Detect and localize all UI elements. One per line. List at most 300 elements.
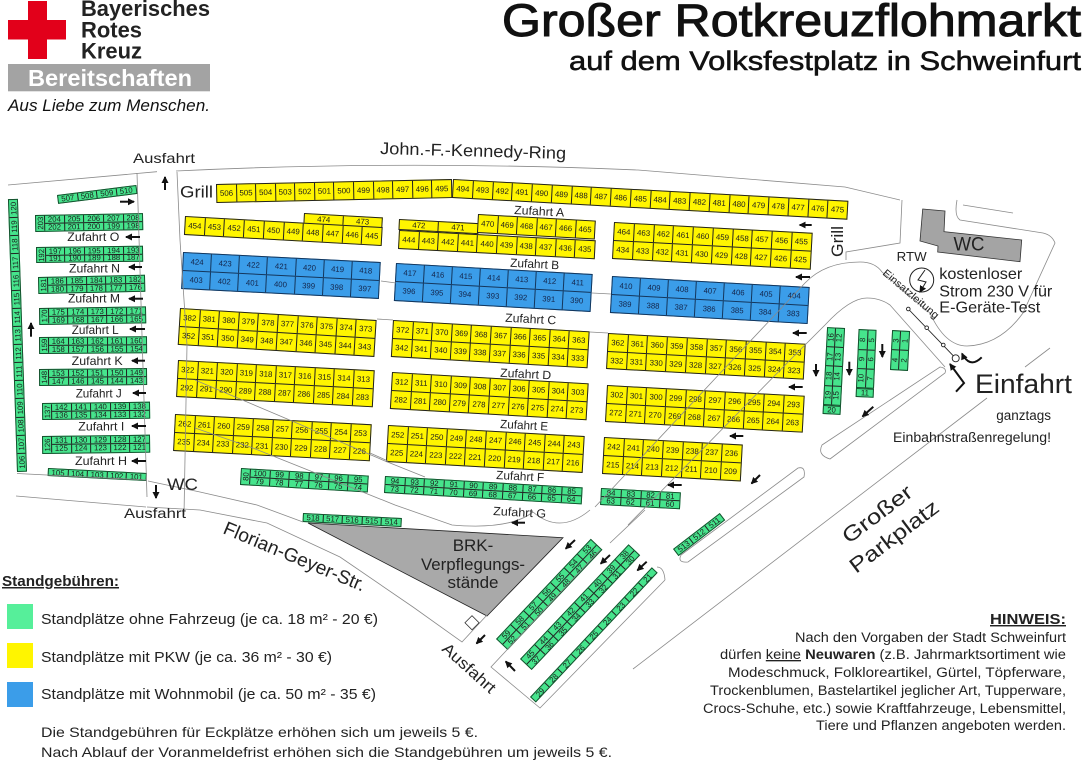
green plots 59-53 and 52-46: 49 [546, 591, 558, 604]
motorhome plots 410-404 and 389-383: 389 [618, 299, 631, 309]
plots 494-475: 490 [535, 188, 549, 198]
plots 454-445: 450 [267, 226, 280, 235]
plots 242-236 and 215-209: 211 [685, 464, 698, 474]
plots 312-303 and 282-273: 306 [513, 384, 526, 394]
label: free power [939, 266, 1053, 317]
plots 242-236 and 215-209: 239 [666, 445, 679, 455]
green plots 518-514: 518 [307, 513, 320, 523]
green plots 126-121: 125 [55, 444, 68, 453]
plots 252-243 and 225-216: 224 [410, 449, 423, 459]
green plots 159-154: 154 [130, 344, 143, 353]
green plots 126-121: 127 [133, 435, 146, 444]
plots 322-313 and 292-283: 315 [318, 372, 332, 382]
plots 252-243 and 225-216: 219 [508, 455, 521, 464]
plots 464-455 and 434-425: 426 [774, 253, 787, 263]
plots 242-236 and 215-209: 240 [646, 444, 660, 454]
arrow: Zufahrt K [132, 360, 145, 362]
plots 242-236 and 215-209: 212 [665, 463, 678, 473]
green plots 181-176: 184 [90, 276, 103, 285]
plots 382-373 and 352-343: 350 [221, 334, 235, 344]
label: one-way regulation [893, 408, 1051, 445]
plots 464-455 and 434-425: 430 [695, 249, 709, 259]
plots 362-353 and 332-323: 323 [787, 365, 801, 375]
plots 322-313 and 292-283: 322 [181, 365, 195, 375]
plots 382-373 and 352-343: 377 [281, 319, 294, 329]
green plots 137-132: 134 [94, 411, 107, 420]
green plots 507-510: 510 [119, 186, 134, 196]
plots 242-236 and 215-209: 241 [627, 443, 640, 453]
green plots 192-187: 193 [127, 245, 140, 254]
plots 242-236 and 215-209: 209 [724, 466, 737, 476]
green plots 159-154: 158 [52, 344, 65, 353]
green plots 513-511 [673, 513, 726, 556]
plots 302-293 and 272-263: 272 [609, 408, 622, 418]
plots 322-313 and 292-283: 290 [219, 385, 233, 395]
plots 322-313 and 292-283: 320 [220, 367, 234, 377]
green plots 170-165 [39, 306, 147, 324]
plots 322-313 and 292-283: 291 [200, 384, 213, 394]
green plots 126-121: 131 [55, 436, 68, 445]
plots 372-363 and 342-333: 370 [435, 328, 449, 338]
plots 302-293 and 272-263: 270 [648, 410, 662, 420]
plots 302-293 and 272-263: 268 [687, 412, 701, 422]
fee notes [41, 724, 612, 760]
notice block: Hinweis: HINWEIS: [990, 612, 1066, 628]
green plots 192-187: 197 [49, 246, 62, 255]
plots 372-363 and 342-333: 335 [532, 352, 545, 361]
green column 106-120: 116 [11, 275, 21, 288]
plots 372-363 and 342-333: 366 [513, 332, 527, 342]
plots 506-495: 502 [298, 187, 311, 196]
plots 506-495: 495 [435, 184, 448, 193]
arrow: Zufahrt O [126, 236, 140, 238]
label: free power: E-Geräte-Test [939, 300, 1041, 317]
plots 362-353 and 332-323 [606, 333, 806, 380]
road outlines [8, 165, 1055, 708]
plots 372-363 and 342-333: 333 [571, 354, 585, 364]
green plot 11: 11 [861, 388, 869, 397]
plots 242-236 and 215-209: 214 [626, 461, 639, 470]
green column 106-120: 110 [15, 384, 24, 396]
green plots 105-101: 105 [51, 468, 64, 477]
plots 302-293 and 272-263: 294 [767, 399, 780, 408]
plots 312-303 and 282-273: 305 [532, 385, 546, 395]
plots 470-465: 469 [500, 220, 514, 230]
green plots 148-143: 153 [52, 369, 65, 378]
plots 362-353 and 332-323: 354 [769, 346, 782, 356]
legend: blue [7, 682, 376, 707]
green column 106-120: 117 [11, 257, 20, 270]
arrow: Zufahrt G [512, 522, 525, 524]
motorhome plots 410-404 and 389-383: 405 [759, 289, 773, 299]
motorhome plots 417-411 and 396-390 [394, 263, 593, 312]
green plots 45-38 and 37-30 [520, 544, 640, 670]
green plots 59-53 and 52-46: 58 [513, 614, 526, 627]
plots 506-495: 505 [239, 188, 253, 197]
plots 464-455 and 434-425: 432 [655, 247, 669, 257]
arrow: Zufahrt B [796, 276, 810, 278]
green plots 59-53 and 52-46: 46 [586, 549, 599, 561]
plots 372-363 and 342-333 [391, 320, 590, 369]
plots 252-243 and 225-216: 244 [548, 439, 561, 449]
green plots 80, 100-95 and 79-74: 78 [275, 477, 284, 487]
arrow: bottom exit [476, 635, 485, 644]
Zufahrt labels in the left area: Zufahrt N [69, 262, 120, 276]
green plots 94-85 and 73-64: 93 [410, 478, 419, 487]
green plots 84-81 and 63-60: 84 [607, 489, 616, 498]
plots 302-293 and 272-263: 269 [668, 411, 681, 421]
green plots 192-187: 194 [107, 245, 120, 255]
plots 362-353 and 332-323: 326 [728, 362, 742, 371]
plots 464-455 and 434-425: 425 [794, 254, 807, 264]
green plots 29-21: 28 [547, 671, 560, 684]
Zufahrt labels in the left area: Zufahrt K [72, 354, 123, 368]
motorhome plots 424-418 and 403-397: 422 [247, 261, 260, 270]
label: Großer Parkplatz: Großer [838, 481, 917, 548]
plots 262-253 and 235-226: 259 [236, 422, 250, 432]
plots 362-353 and 332-323: 356 [729, 344, 743, 354]
green plots 80, 100-95 and 79-74: 74 [353, 482, 362, 492]
plots 464-455 and 434-425: 429 [715, 250, 728, 260]
motorhome plots 424-418 and 403-397: 424 [191, 258, 204, 267]
plots 262-253 and 235-226: 233 [216, 439, 229, 449]
legend: yellow: Standplätze mit PKW (je ca. 36 m² - 30 €) [41, 650, 332, 666]
motorhome plots 424-418 and 403-397 [181, 252, 381, 300]
plots 362-353 and 332-323: 325 [748, 363, 762, 373]
plots 362-353 and 332-323: 359 [670, 341, 684, 351]
arrow: top exit [164, 177, 166, 190]
plots 362-353 and 332-323: 357 [710, 343, 723, 353]
plots 302-293 and 272-263: 302 [610, 390, 623, 400]
plots 444-435: 442 [441, 236, 455, 246]
green plots 94-85 and 73-64: 91 [449, 480, 458, 489]
Zufahrt labels in the central area: Zufahrt C [505, 311, 557, 327]
plots 312-303 and 282-273: 310 [434, 380, 448, 390]
green column 106-120: 115 [12, 293, 21, 306]
green plots 203-198: 198 [127, 221, 140, 230]
green plots 126-121 [42, 434, 150, 453]
green plots 507-510: 509 [100, 188, 114, 199]
motorhome plots 417-411 and 396-390: 393 [486, 292, 500, 301]
plots 470-465: 470 [481, 219, 495, 229]
green plots 80, 100-95 and 79-74 [240, 468, 369, 492]
plots 494-475: 483 [673, 196, 687, 206]
plots 506-495: 496 [416, 184, 429, 194]
green plots 181-176: 177 [110, 283, 123, 293]
green plots 59-53 and 52-46: 51 [519, 620, 532, 632]
plots 464-455 and 434-425: 434 [616, 245, 630, 255]
plots 322-313 and 292-283: 316 [298, 371, 312, 381]
green plots 45-38 and 37-30: 41 [578, 591, 590, 604]
plots 252-243 and 225-216 [386, 425, 585, 473]
arrow: diagonal near 53 [566, 540, 575, 549]
plots 252-243 and 225-216: 223 [429, 450, 443, 460]
plots 454-445: 448 [306, 228, 320, 238]
Zufahrt labels in the left area [67, 230, 127, 468]
notice block: Hinweis: dürfen keine Neuwaren (z.B. Jahrmarktsortiment wie [720, 647, 1066, 662]
green plots 29-21: 29 [534, 686, 546, 698]
green plots 45-38 and 37-30: 44 [537, 634, 550, 647]
motorhome plots 417-411 and 396-390: 391 [542, 295, 555, 305]
green plots 148-143: 145 [91, 377, 104, 386]
green plots 84-81 and 63-60: 60 [665, 500, 674, 509]
label: one-way regulation: ganztags [996, 408, 1051, 423]
green plots 19-16 and 15-12: 18 [824, 371, 834, 380]
plots 506-495: 500 [337, 186, 351, 195]
green plots 59-53 and 52-46: 57 [527, 600, 539, 613]
plots 382-373 and 352-343: 346 [299, 339, 313, 348]
WC building: WC [954, 235, 984, 256]
plots 444-435: 436 [559, 243, 572, 252]
motorhome plots 424-418 and 403-397: 402 [218, 277, 231, 287]
plots 242-236 and 215-209: 236 [725, 448, 738, 458]
motorhome plots 424-418 and 403-397: 403 [190, 276, 203, 286]
motorhome plots 424-418 and 403-397: 418 [359, 266, 373, 276]
green plots 59-53 and 52-46: 50 [532, 605, 545, 618]
green plots 170-165: 172 [110, 306, 124, 315]
plots 464-455 and 434-425: 428 [734, 251, 748, 261]
plots 372-363 and 342-333: 342 [395, 344, 409, 354]
icon: electricity lightning circle [910, 268, 934, 292]
green plots 203-198: 205 [67, 214, 81, 223]
Zufahrt labels in the central area: Zufahrt D [500, 366, 552, 382]
green plots 45-38 and 37-30: 37 [530, 654, 542, 666]
plots 372-363 and 342-333: 369 [455, 329, 468, 339]
green plots 80, 100-95 and 79-74: 96 [334, 473, 343, 483]
plots 454-445 [184, 216, 383, 246]
green plots 59-53 and 52-46: 55 [554, 572, 566, 584]
green plots 203-198: 199 [107, 221, 120, 231]
green plots 105-101: 104 [71, 469, 84, 478]
plots 506-495: 497 [396, 185, 409, 194]
green plots 94-85 and 73-64: 90 [468, 481, 478, 491]
plots 464-455 and 434-425: 455 [795, 236, 808, 246]
logo slogan: Aus Liebe zum Menschen. [7, 96, 210, 115]
green plots 94-85 and 73-64: 94 [390, 477, 399, 486]
green plots 94-85 and 73-64: 67 [507, 491, 516, 501]
plots 312-303 and 282-273: 279 [453, 399, 466, 409]
plots 302-293 and 272-263: 264 [766, 417, 779, 426]
plots 382-373 and 352-343: 343 [358, 342, 371, 352]
green plots 203-198: 200 [87, 222, 100, 231]
plots 312-303 and 282-273: 303 [571, 388, 585, 397]
plots 252-243 and 225-216: 250 [430, 432, 444, 442]
green plots 45-38 and 37-30: 42 [564, 606, 577, 618]
label: Grill top: Grill [180, 183, 213, 202]
green plots 170-165: 175 [52, 307, 65, 316]
plots 312-303 and 282-273 [390, 372, 589, 421]
label: BRK-Verpflegungsstände: BRK- [453, 536, 493, 555]
motorhome plots 417-411 and 396-390: 394 [458, 290, 472, 300]
plots 372-363 and 342-333: 363 [572, 336, 586, 345]
plots 362-353 and 332-323: 329 [669, 359, 683, 368]
plots 322-313 and 292-283: 314 [337, 373, 351, 383]
motorhome plots 410-404 and 389-383: 387 [674, 302, 687, 312]
green plots 126-121: 130 [75, 435, 88, 444]
Zufahrt labels in the left area: Zufahrt O [67, 230, 119, 244]
plots 494-475 [452, 179, 848, 219]
arrow: Zufahrt D [789, 386, 803, 388]
plots 464-455 and 434-425: 427 [754, 252, 768, 262]
arrow: Zufahrt N [129, 266, 142, 268]
plots 372-363 and 342-333: 339 [454, 347, 467, 357]
green column 106-120: 118 [10, 239, 19, 251]
green plots 192-187: 196 [68, 246, 81, 255]
plots 262-253 and 235-226: 229 [294, 443, 307, 453]
green column 106-120: 120 [9, 202, 18, 215]
green plots 181-176: 182 [129, 275, 142, 284]
plots 494-475: 477 [791, 202, 805, 212]
notice block: Hinweis: Crocs-Schuhe, etc.) sowie Kraftfahrzeuge, Lebensmittel, [703, 701, 1066, 716]
green plots 4-3 and 2-1: 3 [892, 338, 901, 343]
green plots 518-514: 514 [385, 517, 398, 527]
green plots 29-21: 24 [601, 614, 614, 627]
green plots 181-176 [38, 275, 146, 294]
arrow: diagonal near 209 [752, 475, 760, 484]
green plots 148-143: 144 [111, 377, 124, 386]
plots 474-473 [303, 212, 383, 227]
plots 464-455 and 434-425: 464 [617, 227, 631, 237]
plots 262-253 and 235-226: 234 [196, 438, 210, 448]
green plots 45-38 and 37-30: 38 [618, 549, 631, 561]
green plots 513-511: 511 [707, 516, 722, 530]
plots 494-475: 479 [752, 200, 765, 210]
plots 312-303 and 282-273: 274 [551, 405, 564, 414]
fee notes: Die Standgebühren für Eckplätze erhöhen sich um jeweils 5 €. [41, 724, 478, 740]
motorhome plots 424-418 and 403-397: 397 [358, 284, 372, 294]
arrow: entry curve lower [950, 364, 964, 392]
green plots 59-53 and 52-46: 53 [581, 543, 593, 556]
green plots 19-16 and 15-12: 19 [823, 390, 832, 399]
plots 312-303 and 282-273: 311 [415, 379, 428, 388]
green plots 105-101: 101 [129, 472, 143, 481]
plots 262-253 and 235-226: 231 [255, 441, 268, 451]
plots 372-363 and 342-333: 334 [551, 353, 565, 363]
plots 252-243 and 225-216: 218 [527, 456, 541, 465]
label: BRK-Verpflegungsstände [421, 536, 525, 592]
arrow: Zufahrt J [133, 392, 146, 394]
green plots 159-154: 162 [91, 336, 104, 345]
plots 252-243 and 225-216: 220 [488, 453, 502, 463]
plots 470-465 [477, 214, 596, 239]
motorhome plots 424-418 and 403-397: 400 [274, 280, 287, 290]
plots 454-445: 445 [365, 231, 379, 241]
green plots 59-53 and 52-46: 48 [559, 577, 572, 589]
green plots 94-85 and 73-64: 65 [547, 493, 556, 503]
motorhome plots 424-418 and 403-397: 421 [275, 262, 288, 272]
green plots 192-187: 192 [37, 248, 46, 261]
arrow: diagonal near 21 [637, 562, 647, 570]
green plots 4-3 and 2-1: 1 [900, 339, 909, 343]
Zufahrt labels in the central area: Zufahrt G [493, 504, 547, 521]
motorhome plots 424-418 and 403-397: 420 [303, 263, 317, 273]
plots 362-353 and 332-323: 330 [650, 358, 663, 367]
label: one-way regulation: Einbahnstraßenregelung! [893, 430, 1051, 445]
arrow: left column up [30, 323, 32, 337]
motorhome plots 417-411 and 396-390: 412 [543, 277, 556, 286]
green plots 192-187: 188 [107, 253, 120, 262]
green plots 192-187: 195 [88, 246, 101, 255]
plots 454-445: 452 [227, 223, 241, 233]
label: Einsatzleitung: Einsatzleitung [880, 267, 941, 322]
green plots 59-53 and 52-46: 54 [567, 557, 580, 570]
green plots 137-132: 133 [113, 411, 126, 420]
small hut near lower exit [465, 616, 479, 630]
plots 312-303 and 282-273: 280 [433, 398, 447, 408]
green plots 94-85 and 73-64: 92 [429, 479, 438, 488]
logo text: Bayerisches Rotes Kreuz [81, 0, 210, 63]
Zufahrt labels in the left area: Zufahrt J [76, 387, 122, 401]
street label: Florian-Geyer-Str.: Florian-Geyer-Str. [220, 518, 368, 596]
green plots 126-121: 128 [114, 435, 127, 444]
plots 382-373 and 352-343: 381 [202, 315, 216, 324]
label: BRK-Verpflegungsstände: Verpflegungs- [421, 555, 525, 574]
green plots 29-21: 26 [574, 643, 587, 655]
green plots 45-38 and 37-30: 32 [597, 582, 609, 595]
plots 262-253 and 235-226: 262 [177, 419, 191, 429]
plots 262-253 and 235-226: 227 [333, 445, 346, 455]
green plots 4-3 and 2-1: 2 [899, 358, 908, 363]
food stall area: grey triangle [308, 523, 563, 616]
green plots 80, 100-95 and 79-74: 97 [314, 472, 324, 481]
Zufahrt labels in the left area: Zufahrt H [75, 454, 127, 468]
green plots 94-85 and 73-64: 89 [488, 482, 497, 492]
subtitle: auf dem Volksfestplatz in Schweinfurt [569, 46, 1082, 76]
label: RTW: RTW [897, 249, 927, 264]
green plots 80, 100-95 and 79-74: 76 [314, 480, 323, 489]
plots 444-435: 437 [539, 242, 553, 251]
green plots 80, 100-95 and 79-74: 80 [241, 472, 251, 481]
Zufahrt labels in the central area [493, 203, 565, 521]
green plots 518-514: 515 [365, 516, 379, 526]
green plots 19-16 and 15-12: 13 [833, 352, 843, 361]
arrow: diagonal near 11 [862, 407, 873, 416]
motorhome plots 410-404 and 389-383: 409 [647, 283, 660, 292]
plots 382-373 and 352-343: 380 [222, 316, 236, 326]
green plots 159-154: 157 [72, 344, 85, 353]
plots 444-435: 444 [402, 234, 416, 244]
plots 252-243 and 225-216: 247 [489, 436, 503, 445]
notice block: Hinweis: Nach den Vorgaben der Stadt Schweinfurt [795, 630, 1066, 645]
green plots 170-165: 169 [52, 315, 65, 324]
label: Einfahrt: Einfahrt [975, 369, 1073, 399]
plots 382-373 and 352-343: 348 [260, 336, 274, 346]
green plots 29-21: 23 [614, 600, 627, 612]
notice block: Hinweis: Tiere und Pflanzen angeboten werden. [816, 718, 1066, 733]
plots 464-455 and 434-425: 463 [637, 228, 650, 238]
plots 242-236 and 215-209: 237 [705, 447, 719, 457]
green plots 170-165: 170 [40, 309, 50, 322]
plots 506-495: 503 [279, 187, 292, 196]
plots 494-475: 475 [831, 205, 844, 214]
label: Ausfahrt left: Ausfahrt [124, 505, 186, 521]
plots 322-313 and 292-283: 286 [297, 389, 311, 399]
legend: yellow [7, 643, 332, 668]
plots 262-253 and 235-226: 255 [314, 426, 328, 436]
plots 494-475: 476 [811, 203, 825, 213]
green plots 507-510: 507 [61, 193, 75, 203]
plots 322-313 and 292-283: 285 [317, 390, 331, 400]
green plots 181-176: 180 [51, 285, 64, 294]
green plots 94-85 and 73-64: 85 [567, 487, 576, 496]
plots 302-293 and 272-263: 295 [747, 398, 761, 407]
plots 262-253 and 235-226: 253 [353, 428, 367, 438]
plots 252-243 and 225-216: 243 [567, 440, 581, 450]
green plots 19-16 and 15-12: 15 [831, 391, 841, 400]
plots 470-465: 468 [520, 221, 533, 231]
plots 252-243 and 225-216: 221 [468, 452, 482, 462]
green column 106-120: 108 [16, 420, 25, 433]
